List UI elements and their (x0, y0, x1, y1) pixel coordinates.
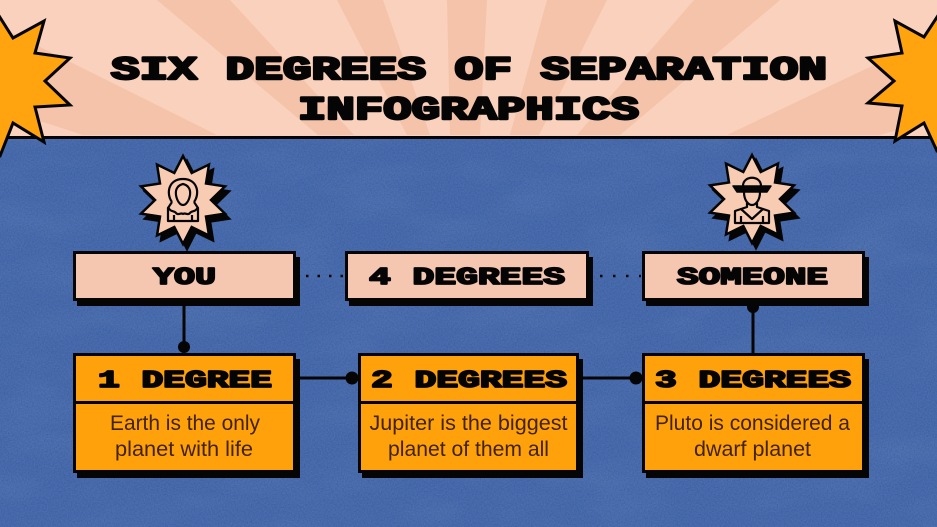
box: you (74, 252, 300, 306)
card: 2 degrees: 2 DEGREES (371, 368, 567, 395)
box: someone: SOMEONE (677, 265, 828, 292)
box: 4 degrees: 4 DEGREES (369, 265, 565, 292)
box: someone (644, 252, 869, 306)
card: 3 degrees: dwarf planet (694, 438, 811, 461)
connector: someone to 3 degrees (747, 301, 759, 354)
card: 3 degrees (643, 354, 869, 478)
card: 3 degrees: Pluto is considered a (655, 412, 850, 435)
card: 2 degrees: planet of them all (388, 438, 549, 461)
dotted connector: you to 4 degrees (306, 275, 344, 277)
header panel with sun rays (0, 0, 937, 139)
dotted connector: 4 degrees to someone (600, 275, 641, 277)
card: 1 degree: planet with life (115, 438, 253, 461)
card: 2 degrees (359, 354, 583, 478)
title: SIX DEGREES OF SEPARATION (111, 52, 827, 89)
card: 2 degrees: Jupiter is the biggest (370, 412, 568, 435)
card: 1 degree (74, 354, 300, 478)
card: 3 degrees: 3 DEGREES (655, 368, 851, 395)
connector: you to 1 degree (178, 304, 190, 353)
icon: man with sombrero badge (710, 155, 798, 248)
card: 1 degree: Earth is the only (110, 412, 260, 435)
starburst: top left (0, 8, 70, 156)
title: INFOGRAPHICS (298, 92, 639, 129)
card: 1 degree: 1 DEGREE (98, 368, 272, 395)
icon: woman badge (141, 156, 229, 249)
connector: 2 degrees to 3 degrees (583, 372, 642, 384)
title (111, 52, 827, 129)
box: you: YOU (153, 265, 216, 292)
starburst: top right (868, 8, 937, 151)
connector: 1 degree to 2 degrees (300, 372, 358, 384)
box: 4 degrees (346, 252, 593, 306)
